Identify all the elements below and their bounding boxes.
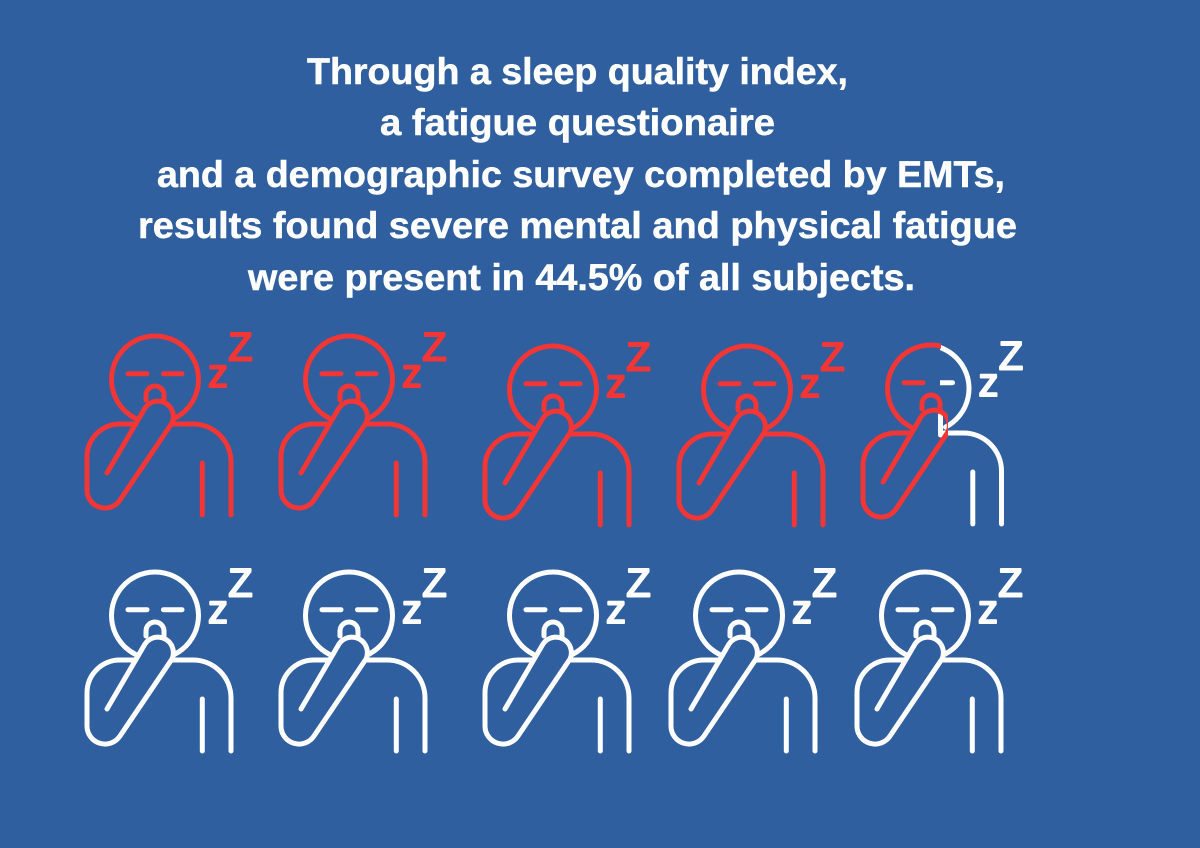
icon: white sleepy person 5 bbox=[857, 562, 1023, 751]
icon: white sleepy person 3 bbox=[485, 562, 651, 751]
icon: white sleepy person 1 bbox=[87, 562, 253, 751]
icon: white sleepy person 3: z bbox=[606, 588, 626, 632]
icon: red sleepy person 2 bbox=[281, 326, 447, 515]
title text: and a demographic survey completed by EMTs, bbox=[157, 154, 1005, 195]
icon: red sleepy person 2: z bbox=[402, 352, 422, 396]
icon: white sleepy person 2: Z bbox=[422, 562, 447, 606]
icon: red sleepy person 1: z bbox=[208, 352, 228, 396]
icon row: remaining subjects (white) bbox=[87, 562, 1023, 751]
icon row: affected subjects (red) bbox=[87, 326, 1023, 525]
white portion of figure bbox=[938, 341, 1023, 526]
icon: white sleepy person 5: z bbox=[978, 588, 998, 632]
icon: white sleepy person 1: z bbox=[208, 588, 228, 632]
title text: were present in 44.5% of all subjects. bbox=[247, 257, 915, 298]
icon: white sleepy person 5: Z bbox=[998, 562, 1023, 606]
icon: red sleepy person 3: z bbox=[606, 362, 626, 406]
icon: white sleepy person 4: Z bbox=[812, 562, 837, 606]
white portion of figure: Z bbox=[999, 334, 1023, 378]
icon: red sleepy person 4 bbox=[679, 336, 845, 525]
icon: red sleepy person 4: Z bbox=[820, 336, 845, 380]
infographic canvas bbox=[84, 56, 1023, 754]
red portion of figure bbox=[860, 342, 948, 520]
title text: a fatigue questionaire bbox=[380, 102, 775, 143]
icon: red sleepy person 1: Z bbox=[228, 326, 253, 370]
title text: Through a sleep quality index, bbox=[307, 51, 848, 92]
icon: white sleepy person 2: z bbox=[402, 588, 422, 632]
icon: red sleepy person 3: Z bbox=[626, 336, 651, 380]
icon: white sleepy person 4 bbox=[671, 562, 837, 751]
white portion of figure: z bbox=[978, 361, 998, 405]
icon: partially red sleepy person 5 bbox=[863, 334, 1023, 524]
icon: white sleepy person 2 bbox=[281, 562, 447, 751]
icon: red sleepy person 4: z bbox=[800, 362, 820, 406]
icon: white sleepy person 1: Z bbox=[228, 562, 253, 606]
icon: white sleepy person 3: Z bbox=[626, 562, 651, 606]
icon: white sleepy person 4: z bbox=[792, 588, 812, 632]
icon: red sleepy person 2: Z bbox=[422, 326, 447, 370]
title text: results found severe mental and physical fatigue bbox=[138, 205, 1017, 246]
icon: red sleepy person 3 bbox=[485, 336, 651, 525]
title text bbox=[138, 51, 1017, 298]
icon: red sleepy person 1 bbox=[87, 326, 253, 515]
